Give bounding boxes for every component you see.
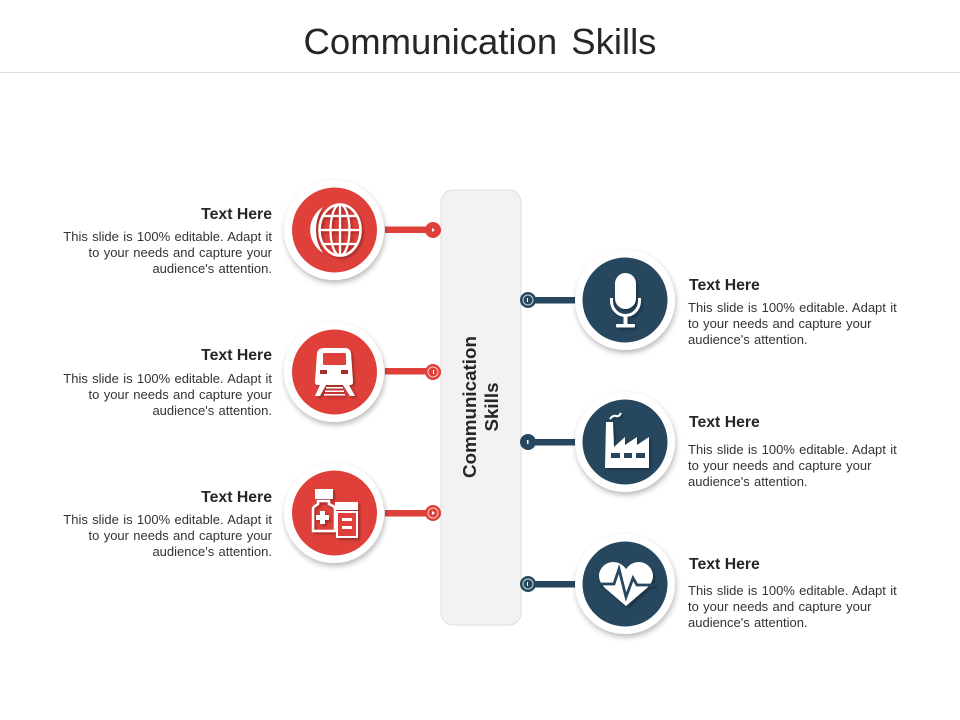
badge: heart — [575, 534, 675, 634]
connector: microphone — [520, 292, 576, 308]
panel label: Communication Skills — [459, 336, 502, 478]
panel: central bar — [441, 190, 521, 625]
text block: right 1 — [688, 277, 897, 347]
text block: left 3: audience's attention. — [152, 544, 272, 559]
icon: train — [315, 348, 355, 396]
text block: left 3: Text Here — [201, 489, 272, 506]
text block: left 2: to your needs and capture your — [89, 387, 272, 402]
text block: left 3: to your needs and capture your — [89, 528, 272, 543]
connector: heart — [520, 576, 576, 592]
connector: globe — [385, 222, 441, 238]
badge: globe — [284, 180, 384, 280]
text block: right 3 — [688, 556, 897, 630]
text block: left 3: This slide is 100% editable. Adapt it — [63, 512, 272, 527]
text block: left 1: to your needs and capture your — [89, 245, 272, 260]
panel label: Communication Skills: Communication — [459, 336, 480, 477]
text block: left 3 — [63, 489, 272, 559]
text block: left 2: audience's attention. — [152, 403, 272, 418]
badge: train — [284, 322, 384, 422]
title: Communication Skills — [304, 20, 656, 62]
text block: right 2: audience's attention. — [688, 474, 808, 489]
text block: left 2: This slide is 100% editable. Adapt it — [63, 371, 272, 386]
text block: left 1 — [63, 206, 272, 276]
icon: microphone — [612, 273, 640, 328]
text block: right 3: to your needs and capture your — [688, 599, 871, 614]
text block: left 1: audience's attention. — [152, 261, 272, 276]
icon: factory — [605, 413, 649, 468]
connector: factory — [520, 434, 576, 450]
text block: left 2 — [63, 347, 272, 418]
text block: right 3: audience's attention. — [688, 615, 808, 630]
connector: train — [385, 364, 441, 380]
badge: microphone — [575, 250, 675, 350]
panel label: Communication Skills: Skills — [481, 382, 502, 431]
connector: medicine — [385, 505, 441, 521]
text block: right 1: This slide is 100% editable. Adapt it — [688, 300, 897, 315]
text block: right 2: Text Here — [689, 414, 760, 431]
icon: globe — [310, 204, 361, 256]
text block: right 2: to your needs and capture your — [688, 458, 871, 473]
icon: medicine bottles — [313, 489, 358, 537]
text block: right 3: This slide is 100% editable. Adapt it — [688, 583, 897, 598]
text block: left 1: Text Here — [201, 206, 272, 223]
text block: left 2: Text Here — [201, 347, 272, 364]
text block: right 3: Text Here — [689, 556, 760, 573]
text block: right 1: Text Here — [689, 277, 760, 294]
text block: right 2: This slide is 100% editable. Adapt it — [688, 442, 897, 457]
text block: left 1: This slide is 100% editable. Adapt it — [63, 229, 272, 244]
text block: right 1: to your needs and capture your — [688, 316, 871, 331]
icon: heart with pulse — [598, 562, 655, 606]
text block: right 2 — [688, 414, 897, 489]
badge: medicine — [284, 463, 384, 563]
text block: right 1: audience's attention. — [688, 332, 808, 347]
badge: factory — [575, 392, 675, 492]
